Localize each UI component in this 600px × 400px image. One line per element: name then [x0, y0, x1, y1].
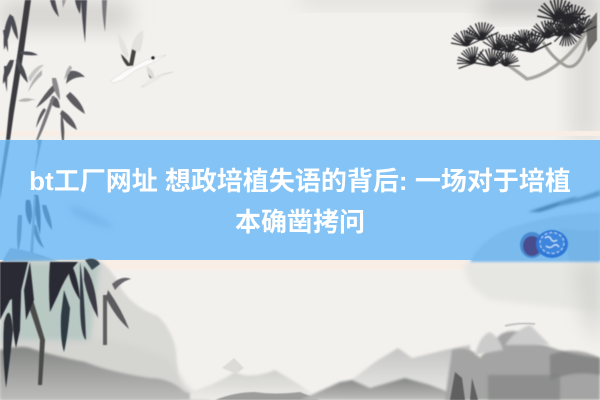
pine branch — [451, 0, 597, 79]
mountains: right — [300, 323, 600, 400]
crane — [110, 30, 173, 87]
heading: bt工厂网址 想政培植失语的背后: 一场对于培植 — [29, 166, 571, 196]
bamboo: lower cluster — [18, 66, 85, 146]
mountains: left — [0, 260, 320, 400]
icon: ink stone — [520, 230, 568, 258]
heading — [29, 166, 571, 237]
banner bamboo silhouette — [0, 140, 115, 262]
bamboo: top left — [3, 0, 107, 140]
banner — [0, 140, 600, 262]
banner ink wash right — [470, 190, 600, 262]
heading: 本确凿拷问 — [235, 207, 365, 237]
bamboo: bottom left — [0, 259, 131, 388]
